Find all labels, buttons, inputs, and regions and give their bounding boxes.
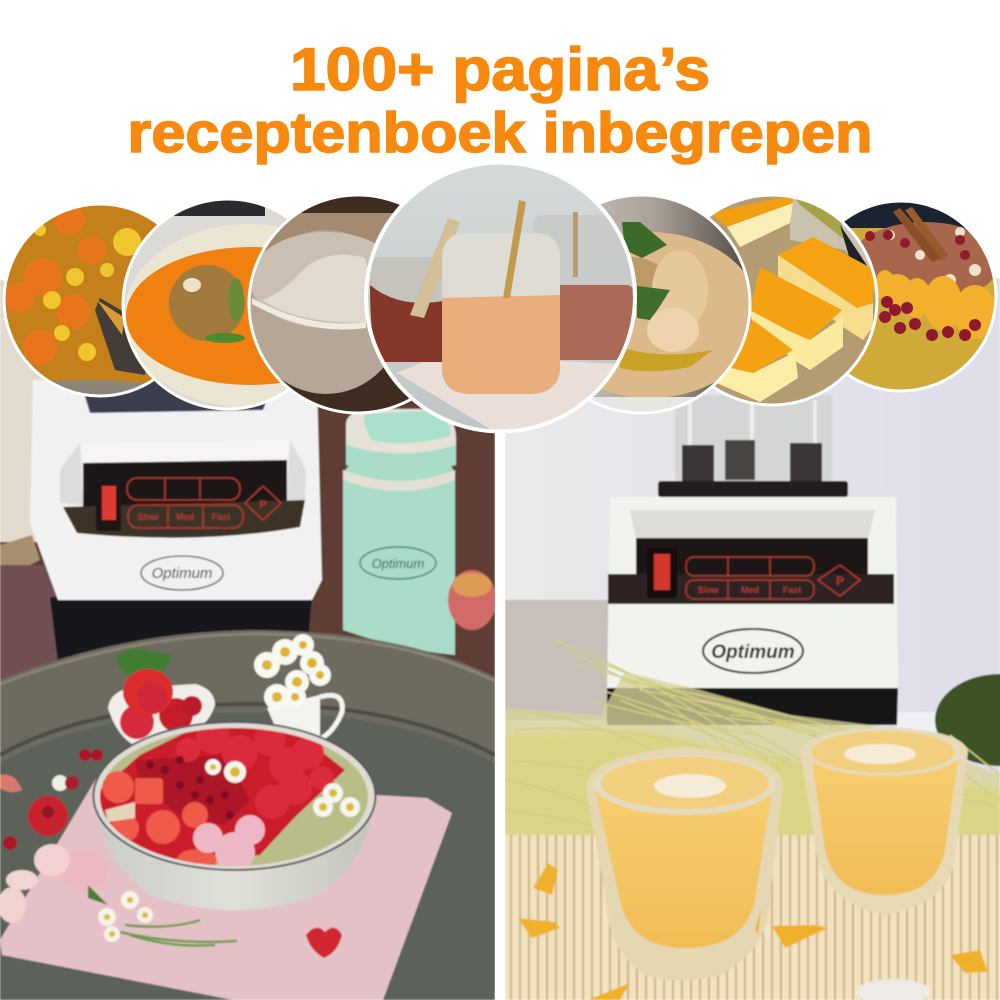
small bowl <box>108 649 215 748</box>
milk jug with flowers <box>254 634 342 738</box>
circle: pumpkin soup <box>122 200 290 410</box>
smoothie bowl <box>94 720 376 910</box>
green flask: Optimum <box>372 556 425 571</box>
scattered flowers and berries <box>0 749 342 958</box>
blender body: Med <box>741 585 759 595</box>
green flask <box>343 409 456 655</box>
blender body: P <box>259 499 267 511</box>
white table edge <box>896 712 938 732</box>
blender body <box>30 380 322 680</box>
petals <box>518 863 988 1000</box>
photo: blender with mango smoothies <box>505 278 1000 1000</box>
blender body: Slow <box>697 585 719 595</box>
glass right <box>800 727 968 915</box>
blender body: Med <box>176 512 194 522</box>
blender body: Fast <box>212 512 230 522</box>
glass left <box>586 747 783 980</box>
blender body: Optimum <box>711 642 795 663</box>
left jar <box>370 257 442 302</box>
middle jar <box>442 233 560 393</box>
wall and table background <box>0 280 58 680</box>
blender body: Fast <box>783 585 801 595</box>
photo: blender with smoothie bowl <box>0 280 496 1000</box>
title <box>128 36 873 165</box>
circle: hummus <box>588 196 752 414</box>
pink flower <box>448 570 496 630</box>
wheat grass <box>505 640 1000 862</box>
circle: fruit pudding <box>844 202 998 392</box>
blender body: Slow <box>137 512 159 522</box>
bamboo mat <box>505 835 1000 1000</box>
white garlic <box>856 979 930 1000</box>
circle: flour bowl <box>248 196 412 414</box>
tray <box>0 630 495 1000</box>
blender body: Optimum <box>152 565 212 582</box>
mango <box>935 674 1000 766</box>
circle: peach smoothie jar <box>365 160 640 435</box>
title: receptenboek inbegrepen <box>128 101 873 165</box>
jar on blender <box>658 395 848 497</box>
blender body: P <box>836 574 844 588</box>
circle: mango cheesecake <box>710 196 878 406</box>
blender body <box>607 497 898 725</box>
circle: flower cake <box>2 206 157 398</box>
pink napkin <box>0 772 452 1000</box>
grey wall shadow <box>505 600 610 720</box>
back jar <box>533 215 632 280</box>
title: 100+ pagina’s <box>290 36 710 103</box>
